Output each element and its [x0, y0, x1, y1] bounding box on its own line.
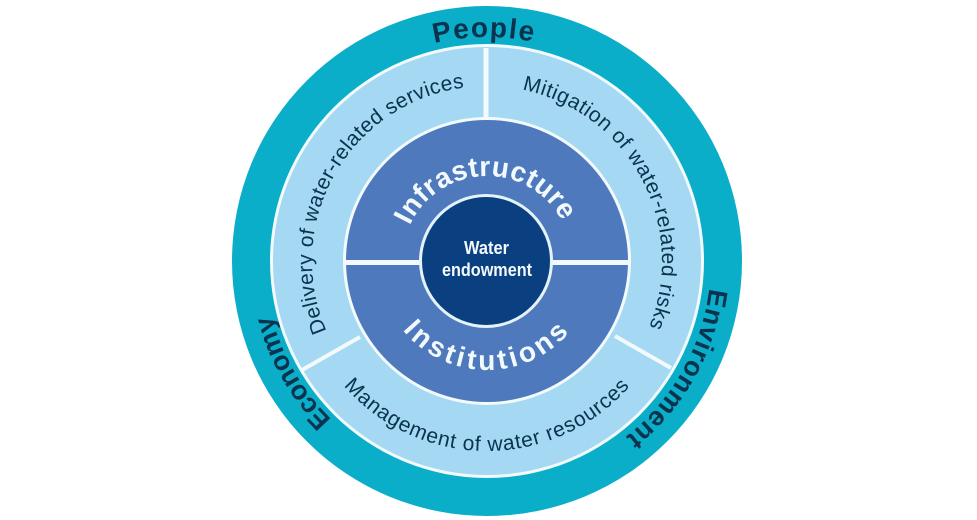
- label: Economy: Economy: [258, 320, 330, 431]
- inner ring: infrastructure and institutions: [343, 117, 631, 405]
- outer ring: people, environment, economy: [232, 6, 742, 516]
- centre circle: water endowment: endowment: [442, 260, 532, 280]
- label: People: People: [432, 18, 534, 43]
- label: Environment: Environment: [626, 290, 728, 449]
- text: Mitigation of water-related risks: Mitigation of water-related risks: [524, 76, 677, 329]
- centre circle: water endowment: [419, 194, 553, 328]
- text: Management of water resources: Management of water resources: [344, 377, 628, 451]
- centre circle: water endowment: Water: [464, 238, 509, 258]
- middle ring: water management functions: [270, 44, 704, 478]
- label: Institutions: Institutions: [404, 318, 567, 370]
- text: Delivery of water-related services: Delivery of water-related services: [299, 77, 463, 335]
- label: Infrastructure: Infrastructure: [393, 158, 572, 224]
